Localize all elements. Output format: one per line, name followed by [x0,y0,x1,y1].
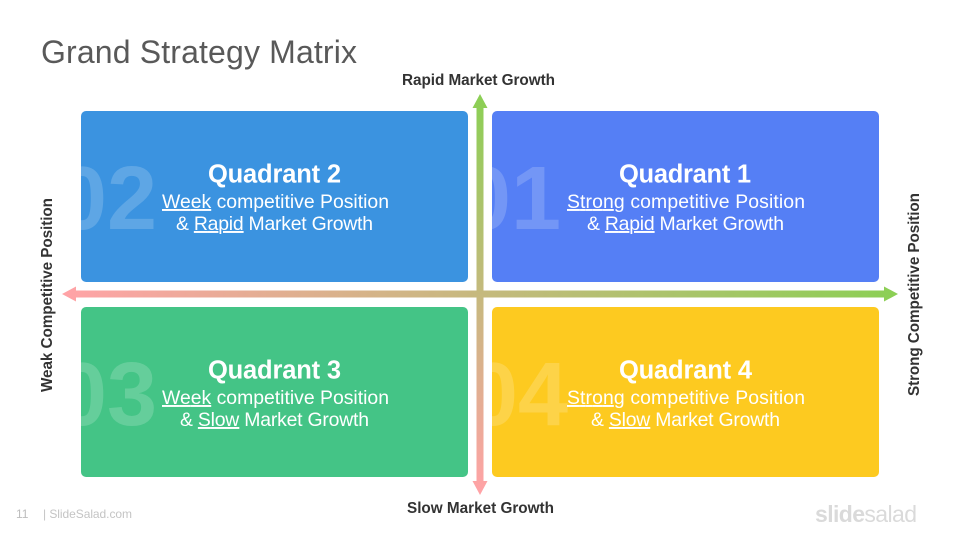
description: quadrant 3 [162,387,389,431]
description: quadrant 4: Strong competitive Position [567,387,805,409]
number 01: 01 [461,149,561,249]
description: quadrant 1 [567,191,805,235]
description: quadrant 2 [162,191,389,235]
axis label: right: Strong Competitive Position [906,193,923,396]
number 03: 03 [57,345,157,445]
heading: quadrant 1: Quadrant 1 [619,160,751,188]
description: quadrant 3: Week competitive Position [162,387,389,409]
arrow: vertical axis [472,94,488,495]
panel: quadrant 2 [57,111,468,282]
panel: quadrant 1 [461,111,879,282]
arrow: horizontal axis [62,286,898,302]
description: quadrant 1: & Rapid Market Growth [587,213,784,235]
number 04: 04 [468,345,568,445]
axis label: bottom: Slow Market Growth [407,500,554,517]
axis label: left: Weak Competitive Position [39,198,56,392]
description: quadrant 4: & Slow Market Growth [591,409,780,431]
description: quadrant 3: & Slow Market Growth [180,409,369,431]
heading: quadrant 3: Quadrant 3 [208,356,341,384]
panel: quadrant 3 [57,307,468,477]
description: quadrant 1: Strong competitive Position [567,191,805,213]
axis label: top: Rapid Market Growth [402,72,555,89]
description: quadrant 2: & Rapid Market Growth [176,213,373,235]
description: quadrant 2: Week competitive Position [162,191,389,213]
heading: quadrant 4: Quadrant 4 [619,356,753,384]
logo: slidesalad: slidesalad [815,501,917,527]
page number: 11 [16,507,29,521]
panel: quadrant 4 [468,307,879,477]
heading: quadrant 2: Quadrant 2 [208,160,341,188]
footer source: | SlideSalad.com [43,507,132,521]
title: Grand Strategy Matrix [41,34,357,70]
description: quadrant 4 [567,387,805,431]
number 02: 02 [57,149,157,249]
